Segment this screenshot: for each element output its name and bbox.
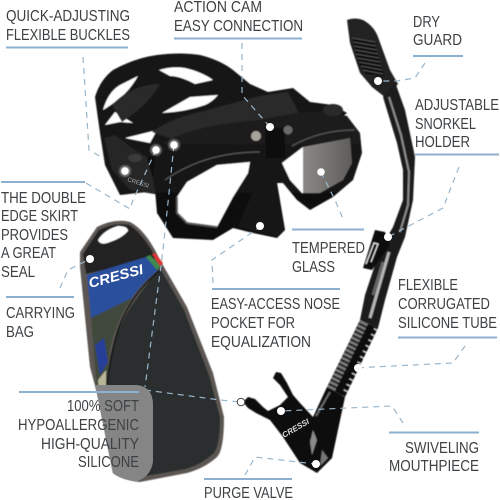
label: nose pocket: EQUALIZATION — [211, 334, 311, 351]
label: swiveling mouthpiece — [389, 432, 479, 475]
side knob — [323, 104, 343, 116]
tube highlights — [389, 97, 409, 232]
label: tempered glass — [292, 230, 365, 276]
label: action cam easy connection — [174, 0, 303, 38]
label: adjustable snorkel holder: SNORKEL — [415, 116, 476, 133]
left lens — [177, 162, 250, 227]
snorkel illustration — [243, 18, 415, 473]
strap openings — [103, 67, 218, 143]
label: silicone: 100% SOFT — [67, 398, 139, 415]
right lens — [282, 147, 303, 193]
mask frame — [153, 112, 362, 240]
mask illustration — [95, 54, 362, 240]
label: dry guard: DRY — [413, 14, 440, 31]
label: adjustable snorkel holder: HOLDER — [415, 134, 470, 151]
label: quick-adjusting flexible buckles — [6, 8, 130, 48]
label: carrying bag: BAG — [6, 324, 34, 341]
label: double edge skirt: PROVIDES — [1, 227, 68, 244]
label: double edge skirt: A GREAT — [1, 245, 56, 262]
label: silicone — [18, 392, 139, 471]
label: double edge skirt — [1, 182, 86, 281]
label: silicone: HIGH-QUALITY — [41, 436, 139, 453]
dry guard vents — [352, 37, 384, 76]
bag brand label: CRESSI — [87, 261, 146, 291]
callout leader lines — [60, 43, 465, 475]
label: nose pocket: EASY-ACCESS NOSE — [211, 296, 340, 313]
label: corrugated tube — [398, 277, 497, 338]
lower tube and mouthpiece — [243, 372, 345, 473]
label: carrying bag: CARRYING — [6, 305, 75, 322]
buckle — [104, 135, 160, 195]
label: quick-adjusting flexible buckles: QUICK-ADJUSTING — [6, 8, 130, 25]
strap highlights — [112, 84, 300, 142]
label: nose pocket — [211, 289, 340, 351]
dry guard head — [347, 18, 398, 98]
label: corrugated tube: FLEXIBLE — [398, 277, 458, 294]
label: dry guard — [413, 14, 463, 56]
corrugated section — [327, 320, 378, 397]
label: purge valve — [204, 479, 293, 500]
translucent label panel over bag — [94, 385, 153, 482]
buckle brand: CRESSI — [126, 177, 150, 190]
action cam mount — [265, 128, 285, 158]
label: dry guard: GUARD — [413, 32, 462, 49]
label: adjustable snorkel holder — [415, 97, 499, 154]
label: carrying bag — [6, 297, 75, 341]
label: double edge skirt: THE DOUBLE — [1, 190, 86, 207]
label: double edge skirt: EDGE SKIRT — [1, 208, 78, 225]
holder clip — [363, 230, 390, 270]
label: silicone: SILICONE — [78, 454, 139, 471]
mask strap — [95, 54, 347, 210]
label: action cam easy connection: EASY CONNECTION — [174, 18, 303, 35]
carrying bag illustration — [80, 221, 224, 482]
label: nose pocket: POCKET FOR — [211, 315, 295, 332]
label: silicone: HYPOALLERGENIC — [18, 417, 139, 434]
label: swiveling mouthpiece: MOUTHPIECE — [389, 458, 479, 475]
label: tempered glass: TEMPERED — [292, 240, 365, 257]
label: tempered glass: GLASS — [292, 259, 335, 276]
upper tube — [360, 82, 415, 328]
label: double edge skirt: SEAL — [1, 264, 35, 281]
label: quick-adjusting flexible buckles: FLEXIBLE BUCKLES — [6, 27, 130, 44]
mouthpiece brand: CRESSI — [280, 417, 311, 440]
callout dots — [86, 77, 392, 468]
label: swiveling mouthpiece: SWIVELING — [405, 440, 479, 457]
nose pocket — [238, 165, 285, 236]
